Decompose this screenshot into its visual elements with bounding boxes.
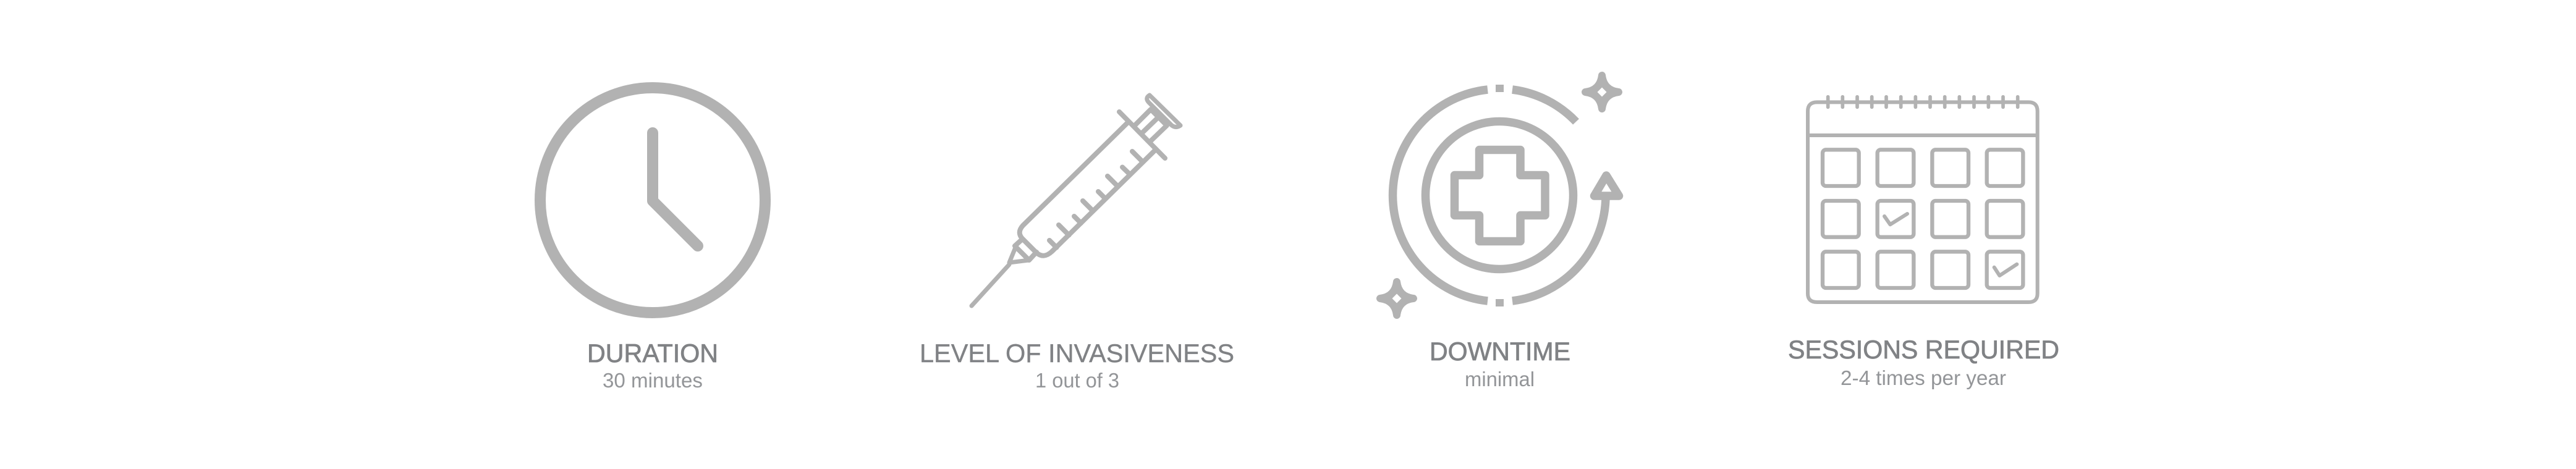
- inner ring: [1425, 121, 1574, 269]
- calendar day cells: [1823, 150, 2023, 288]
- icon: clock: [540, 88, 765, 313]
- text: 30 minutes: 30 minutes: [603, 369, 703, 392]
- panel: downtime: [1380, 75, 1619, 391]
- heading: level of invasiveness: LEVEL OF INVASIVENESS: [920, 339, 1234, 368]
- sparkle top right: [1585, 75, 1619, 109]
- heading: sessions required: SESSIONS REQUIRED: [1788, 335, 2059, 364]
- calendar frame: [1808, 102, 2038, 302]
- panel: sessions required: [1788, 97, 2059, 389]
- outer ring with arrow: [1393, 85, 1619, 306]
- text: 1 out of 3: 1 out of 3: [1035, 369, 1119, 392]
- panel: duration: [540, 88, 765, 392]
- heading: duration: DURATION: [587, 339, 718, 368]
- panel: level of invasiveness: [920, 95, 1234, 392]
- heading: downtime: DOWNTIME: [1430, 337, 1570, 366]
- icon: syringe: [972, 95, 1180, 306]
- icon: recovery cross: [1380, 75, 1619, 315]
- icon: calendar: [1808, 97, 2038, 302]
- medical cross: [1455, 150, 1545, 241]
- text: 2-4 times per year: 2-4 times per year: [1841, 366, 2006, 389]
- check marks: [1884, 214, 2017, 276]
- calendar rings: [1828, 97, 2018, 107]
- text: minimal: minimal: [1465, 368, 1535, 391]
- sparkle bottom left: [1380, 282, 1413, 315]
